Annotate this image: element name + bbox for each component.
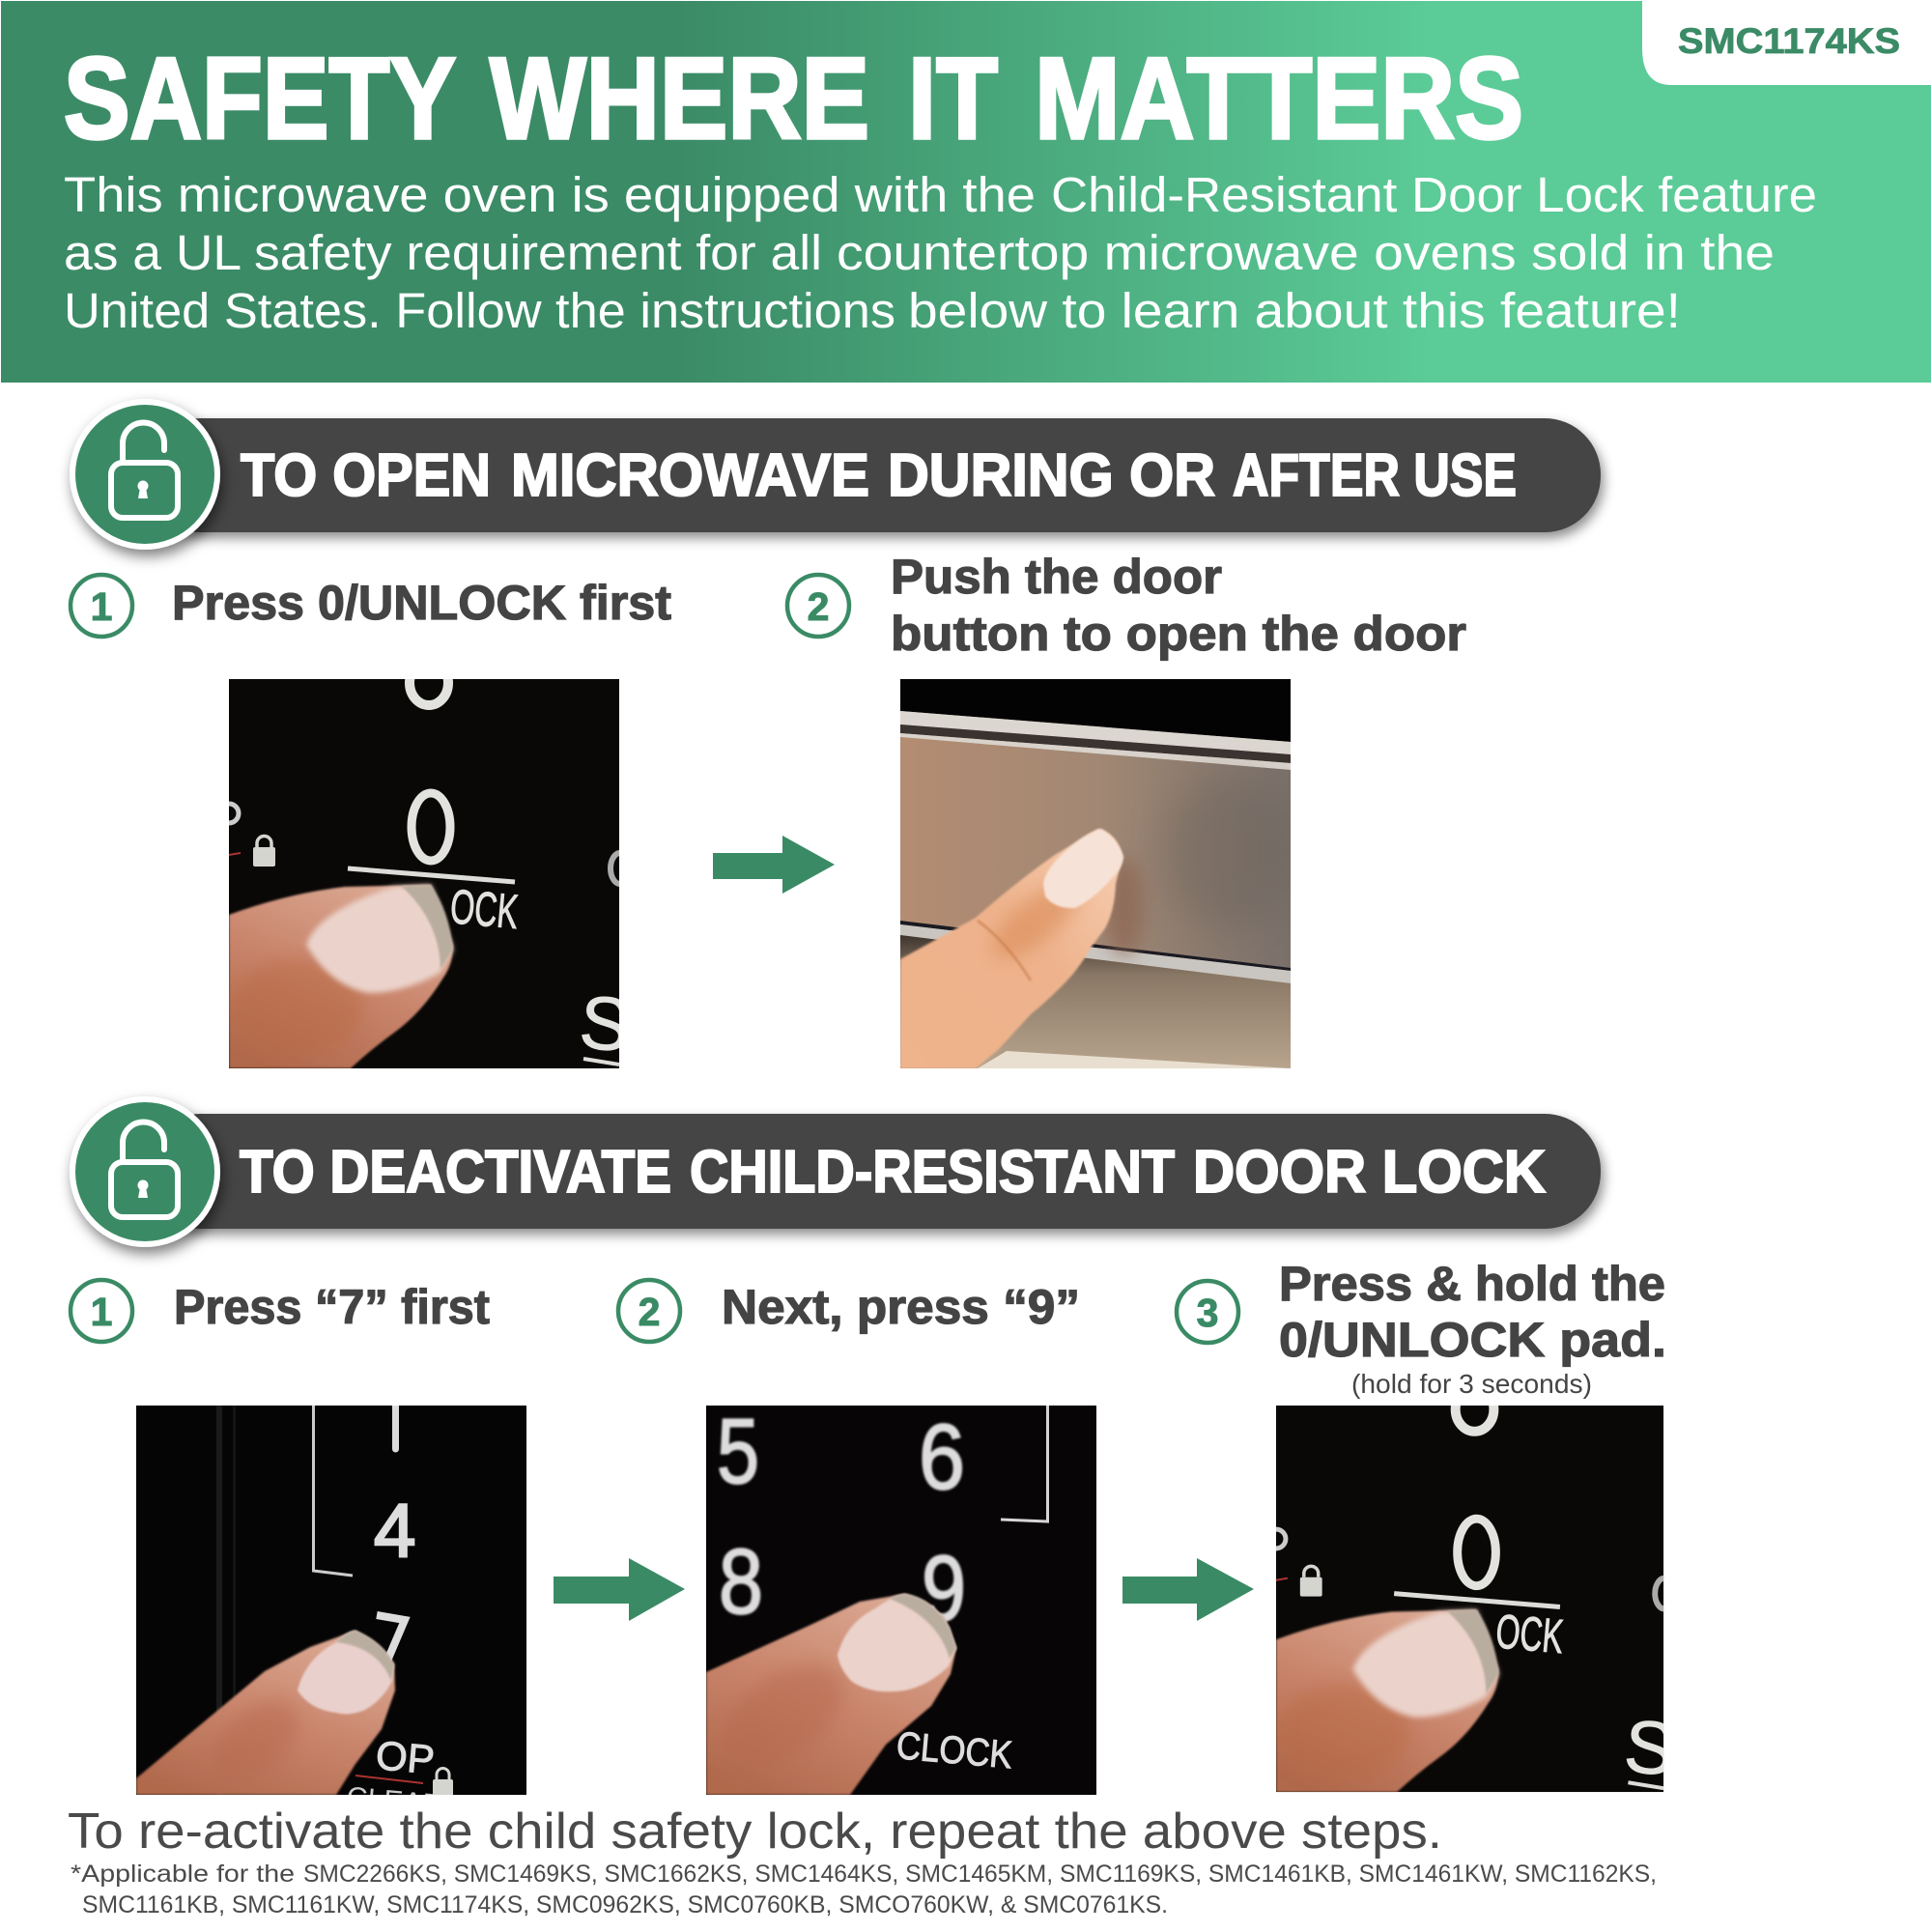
intro paragraph: countertop microwave ovens sold in the (837, 225, 1775, 280)
title: SAFETY (64, 34, 456, 163)
step 2: push door button: 2 (808, 584, 829, 629)
icon: open padlock (70, 1096, 220, 1247)
photo: finger pressing 0/unlock: OCK (448, 879, 521, 939)
photo: finger pressing 9: 6 (919, 1406, 965, 1509)
photo: finger pressing 7: CLEAR (345, 1781, 444, 1822)
photo: finger holding 0/unlock: S (1621, 1705, 1678, 1792)
header banner (1, 0, 1932, 383)
heading text: to open microwave: DURING OR (888, 442, 1215, 509)
heading text: to open microwave: MICROWAVE (511, 442, 869, 509)
photo: finger pressing 9: 5 (717, 1400, 759, 1503)
step 2: push door button (787, 550, 1466, 661)
intro paragraph: as a UL safety requirement for all (64, 225, 822, 280)
step 2: press 9 (618, 1280, 1080, 1342)
photo: finger holding 0/unlock: OCK (1493, 1604, 1566, 1663)
photo: finger holding 0/unlock (1266, 1387, 1678, 1792)
step 2: press 9: Next, press “9” (722, 1280, 1080, 1334)
model tab (1642, 0, 1932, 85)
applicable models footnote (71, 1861, 1657, 1918)
section heading: to open microwave (70, 399, 1601, 550)
intro paragraph: This microwave oven is equipped with the (64, 167, 1036, 222)
photo: finger pressing 0/unlock: S (577, 979, 634, 1067)
photo: finger pressing 9: 9 (922, 1537, 966, 1640)
heading text: deactivate lock (240, 1139, 1546, 1206)
step 2: press 9: 2 (639, 1290, 660, 1334)
step 3: press and hold (1177, 1257, 1666, 1399)
step 1: press 7: Press “7” first (174, 1280, 490, 1334)
step 1: press 7 (71, 1280, 490, 1342)
model tab: SMC1174KS (1678, 21, 1900, 61)
title: WHERE (490, 34, 869, 163)
title: IT (908, 34, 998, 163)
heading text: deactivate lock: TO DEACTIVATE (240, 1139, 671, 1206)
photo: finger pressing 7 (136, 1406, 526, 1822)
step 2: push door button: button to open the door (891, 607, 1466, 661)
applicable models footnote: SMC1161KB, SMC1161KW, SMC1174KS, SMC0962KS, SMC0760KB, SMCO760KW, & SMC0761KS. (82, 1891, 1168, 1918)
step 1: press unlock: 1 (91, 584, 112, 629)
heading text: to open microwave (241, 442, 1517, 509)
step 3: press and hold: Press & hold the (1279, 1257, 1665, 1311)
heading text: deactivate lock: DOOR LOCK (1193, 1139, 1546, 1206)
applicable models footnote: *Applicable for the (71, 1861, 295, 1888)
photo: finger pressing 9: CLOCK (895, 1724, 1014, 1776)
section heading: deactivate lock (70, 1096, 1601, 1247)
step 1: press 7: 1 (91, 1290, 112, 1334)
intro paragraph: below to learn about this feature! (908, 283, 1681, 338)
step 2: push door button: Push the door (891, 550, 1222, 604)
step 3: press and hold: 3 (1197, 1291, 1218, 1335)
photo: finger pressing 9 (706, 1400, 1096, 1795)
title (64, 34, 1523, 163)
arrow (1122, 1558, 1254, 1621)
photo: finger pressing 9: 8 (719, 1530, 763, 1634)
arrow (554, 1558, 685, 1621)
icon: open padlock (70, 399, 220, 550)
heading text: to open microwave: AFTER USE (1233, 442, 1517, 509)
intro paragraph: United States. Follow the instructions (64, 283, 895, 338)
photo: finger pressing 7: OP (374, 1732, 437, 1782)
photo: finger pressing 7: 4 (374, 1488, 415, 1573)
step 3: press and hold: 0/UNLOCK pad. (1279, 1313, 1666, 1367)
photo: finger pushing door button (900, 679, 1296, 1068)
heading text: to open microwave: TO OPEN (241, 442, 491, 509)
photo: finger pressing 0/unlock (229, 679, 619, 1068)
intro paragraph (64, 167, 1817, 338)
step 1: press unlock: Press 0/UNLOCK first (172, 576, 671, 630)
arrow (713, 836, 835, 894)
applicable models footnote: SMC2266KS, SMC1469KS, SMC1662KS, SMC1464KS, SMC1465KM, SMC1169KS, SMC1461KB, SMC1461KW, SMC1162KS, (303, 1861, 1657, 1888)
re-activate note: To re-activate the child safety lock, repeat the above steps. (68, 1804, 1442, 1860)
title: MATTERS (1035, 34, 1523, 163)
step 3: press and hold: (hold for 3 seconds) (1351, 1369, 1592, 1399)
intro paragraph: Child-Resistant Door Lock feature (1051, 167, 1817, 222)
heading text: deactivate lock: CHILD-RESISTANT (690, 1139, 1175, 1206)
